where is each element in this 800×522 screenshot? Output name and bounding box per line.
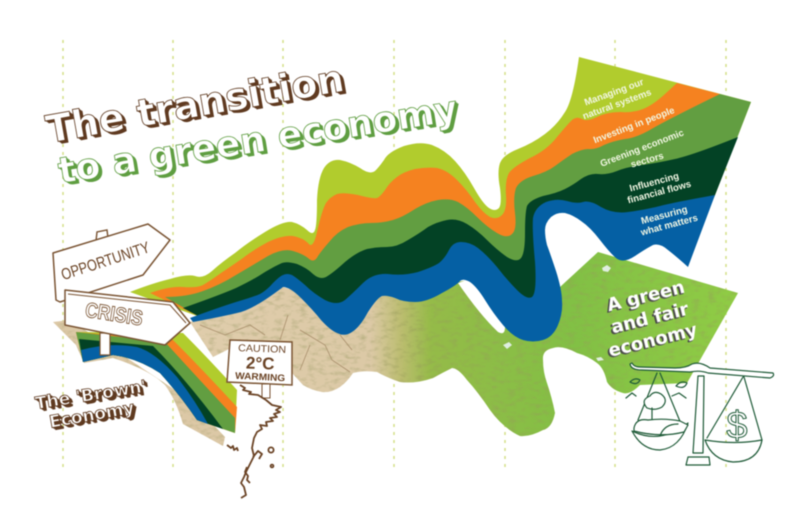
label: the brown economy line 1: The 'Brown' bbox=[34, 377, 148, 414]
ribbon labels: natural systems bbox=[581, 87, 653, 122]
birds bbox=[626, 379, 687, 398]
balance scales bbox=[626, 363, 774, 465]
ribbon: investing in people bbox=[150, 83, 720, 320]
cracked earth under the brown economy band bbox=[53, 320, 225, 446]
ground photo strip: cracked earth turning to grass bbox=[190, 252, 738, 436]
label: the brown economy line 2: Economy bbox=[48, 398, 136, 433]
ribbon labels: financial flows bbox=[626, 179, 692, 206]
title line 2: to a green economy bbox=[55, 89, 460, 192]
caution sign: 2°C bbox=[246, 354, 275, 373]
label: a green: A green bbox=[605, 277, 687, 316]
brown economy rainbow band bbox=[76, 332, 237, 433]
signpost: opportunity: OPPORTUNITY bbox=[59, 239, 152, 284]
ribbon: influencing financial flows bbox=[183, 137, 738, 320]
ribbon: managing our natural systems bbox=[130, 57, 751, 320]
ribbon labels: Investing in people bbox=[592, 105, 676, 146]
ground crack scribbles bbox=[227, 385, 281, 498]
ribbon labels: Managing our bbox=[583, 77, 646, 108]
left pan with landscape bbox=[632, 373, 688, 450]
signpost: opportunity bbox=[53, 224, 170, 302]
caution sign bbox=[227, 340, 292, 398]
ribbon: greening economic sectors bbox=[165, 94, 751, 320]
beam and stand bbox=[630, 363, 774, 465]
signpost: crisis: CRISIS bbox=[84, 299, 144, 330]
ribbon labels bbox=[581, 77, 699, 239]
right pan with dollar sign bbox=[705, 377, 762, 462]
signpost: crisis bbox=[65, 290, 190, 355]
ribbon labels: what matters bbox=[639, 213, 699, 239]
ribbon labels: Influencing bbox=[628, 171, 680, 194]
ribbon labels: Measuring bbox=[640, 204, 689, 227]
white gap between ground and blue ribbon bbox=[458, 279, 505, 333]
ribbon: measuring what matters bbox=[190, 195, 715, 342]
label: and fair: and fair bbox=[609, 299, 691, 338]
caution sign: WARMING bbox=[235, 371, 285, 384]
caution sign: CAUTION bbox=[238, 343, 286, 356]
label: economy: economy bbox=[606, 319, 700, 362]
ribbons of the green economy arrow bbox=[130, 57, 751, 342]
ribbon labels: Greening economic bbox=[599, 128, 685, 170]
title line 1: The transition bbox=[43, 56, 347, 152]
ribbon labels: sectors bbox=[630, 151, 665, 171]
right pan with dollar sign: $ bbox=[726, 405, 748, 447]
